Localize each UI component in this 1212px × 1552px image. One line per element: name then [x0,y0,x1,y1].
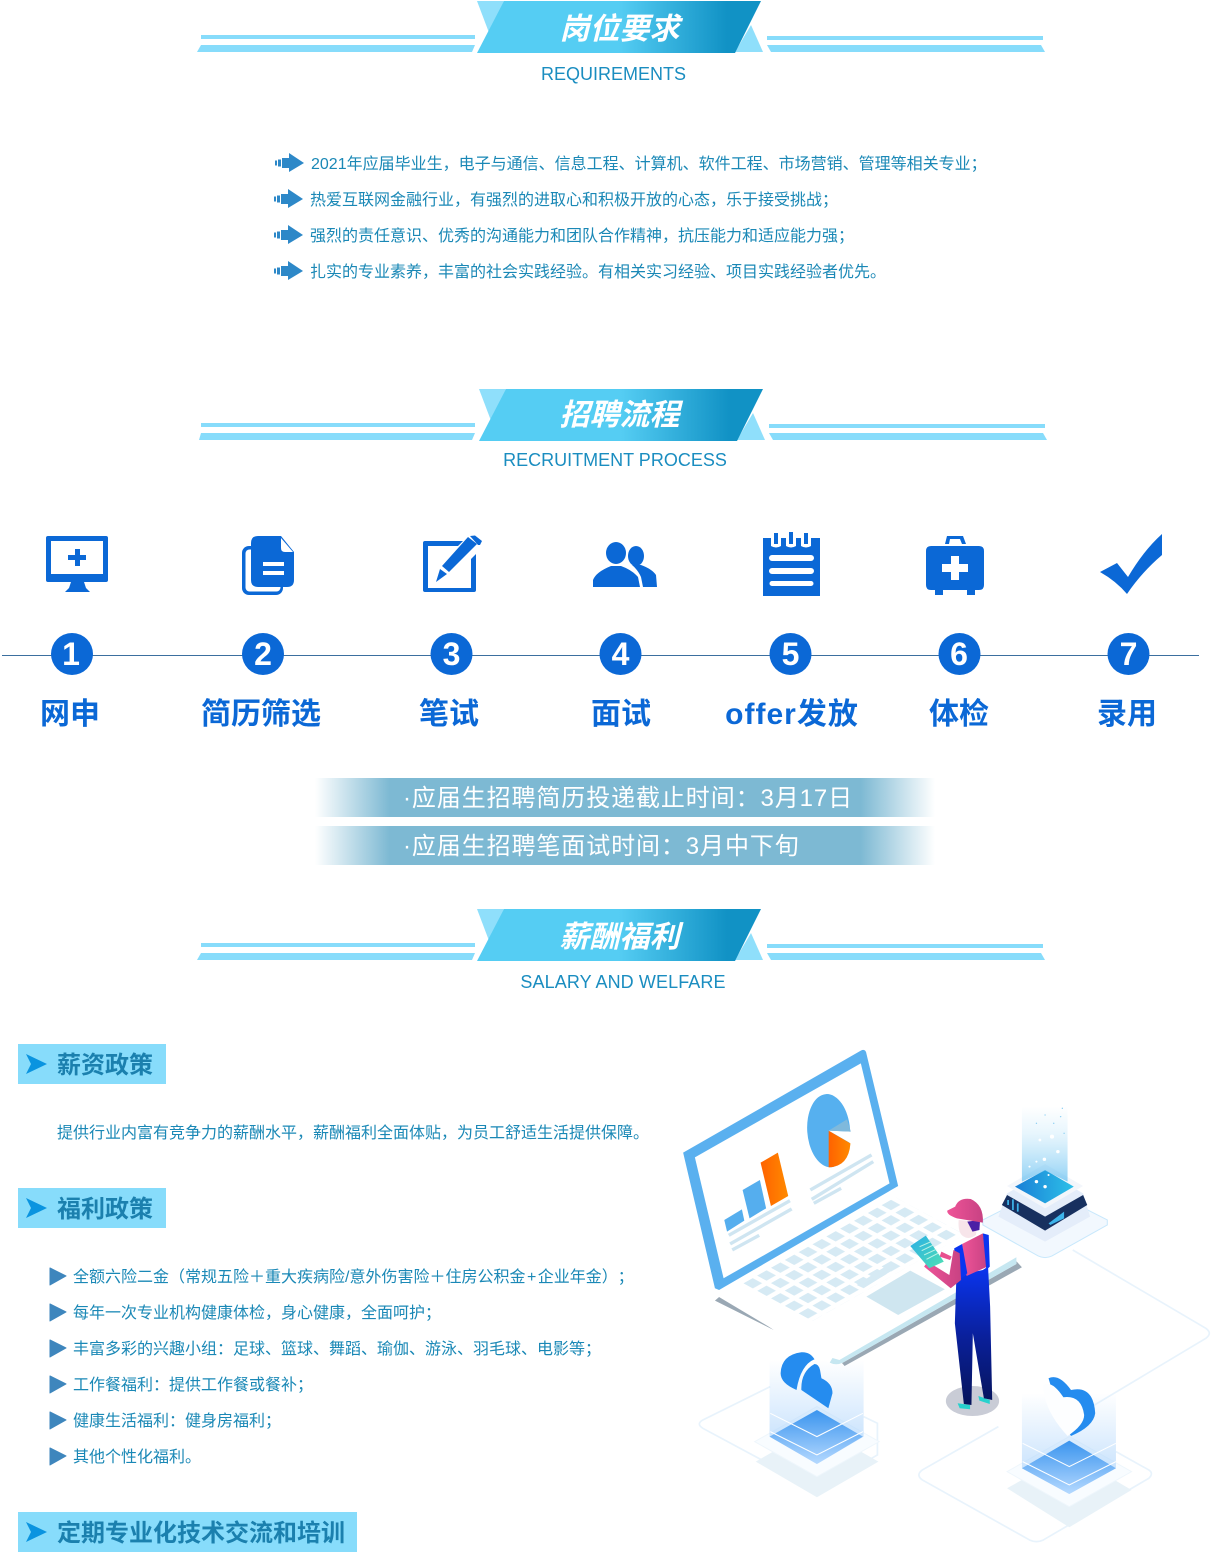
tag: salary policy [18,1044,166,1084]
left node shadow [756,1427,878,1497]
platform outlines [699,1250,1209,1542]
laptop lid [683,1050,898,1290]
person [910,1199,999,1416]
step 3: written test [419,536,482,731]
illustration: laptop and person [683,1050,1209,1542]
section header: requirements: 岗位要求 [560,13,683,46]
welfare item 6: 其他个性化福利。 [73,1448,201,1466]
section header: requirements: REQUIREMENTS [541,64,686,84]
icon: monitor [46,536,108,592]
left cloud icon [781,1352,832,1408]
step 4: interview [591,542,657,731]
welfare item 3: 丰富多彩的兴趣小组：足球、篮球、舞蹈、瑜伽、游泳、羽毛球、电影等； [73,1340,601,1358]
bullet requirement 2: 热爱互联网金融行业，有强烈的进取心和积极开放的心态，乐于接受挑战； [310,191,838,209]
step 6: medical check: 6 [950,636,968,672]
right platform device [983,1107,1107,1258]
section header: salary and welfare: SALARY AND WELFARE [520,972,726,992]
left node prism [770,1360,864,1464]
laptop base [718,1187,1016,1364]
icon: notepad [763,532,820,596]
step 7: hired: 7 [1120,636,1137,672]
tag: training [18,1512,357,1552]
step 6: medical check: 体检 [929,698,989,731]
icon: check mark [1100,534,1162,594]
welfare item 1: 全额六险二金（常规五险＋重大疾病险/意外伤害险＋住房公积金+企业年金）； [73,1267,634,1286]
right cloud icon [1043,1377,1095,1436]
notice: test time: ·应届生招聘笔面试时间：3月中下旬 [403,833,800,860]
step 7: hired: 录用 [1097,698,1157,731]
tag: welfare policy: 福利政策 [57,1196,153,1223]
step 3: written test: 3 [443,636,460,672]
section header: recruitment process [199,389,1047,470]
icon: documents [242,536,294,595]
bullet requirement 1: 2021年应届毕业生，电子与通信、信息工程、计算机、软件工程、市场营销、管理等相关专业； [311,154,987,173]
trackpad [866,1271,945,1315]
section header: salary and welfare: 薪酬福利 [560,921,684,954]
space bar [857,1263,898,1288]
section header: recruitment process: 招聘流程 [560,399,683,432]
step 2: resume screening: 简历筛选 [201,698,321,731]
welfare item 5: 健康生活福利：健身房福利； [73,1412,281,1430]
step 1: online application: 1 [62,636,80,672]
step 7: hired [1097,534,1162,731]
step 6: medical check [926,536,989,731]
notice: resume deadline: ·应届生招聘简历投递截止时间：3月17日 [403,785,853,812]
section header: requirements [197,1,1045,84]
section header: recruitment process: RECRUITMENT PROCESS [503,450,727,470]
icon: edit note [423,536,482,592]
icon: medical kit [926,536,984,595]
right node shadow [1007,1453,1132,1527]
step 1: online application [40,536,108,731]
bar chart [724,1153,792,1250]
tag: training: 定期专业化技术交流和培训 [57,1519,345,1547]
timeline line [2,654,1199,656]
bullet requirement 3: 强烈的责任意识、优秀的沟通能力和团队合作精神，抗压能力和适应能力强； [310,226,854,245]
keyboard [743,1197,965,1321]
requirements list [274,153,987,281]
bullet requirement 4: 扎实的专业素养，丰富的社会实践经验。有相关实习经验、项目实践经验者优先。 [310,263,886,281]
right node tile [1007,1437,1132,1507]
tag: welfare policy [18,1188,166,1228]
laptop base shadow [715,1261,1022,1366]
step 2: resume screening: 2 [254,636,272,672]
step 2: resume screening [201,536,321,731]
salary paragraph: 提供行业内富有竞争力的薪酬水平，薪酬福利全面体贴，为员工舒适生活提供保障。 [57,1124,649,1142]
icon: two people [593,542,657,587]
welfare item 2: 每年一次专业机构健康体检，身心健康，全面呵护； [73,1304,441,1322]
step 4: interview: 面试 [591,698,651,731]
laptop screen [695,1063,890,1278]
step 4: interview: 4 [612,636,630,672]
pie chart [805,1093,873,1203]
step 3: written test: 笔试 [419,698,479,731]
welfare list [50,1267,634,1466]
left node tile [755,1407,879,1477]
right node prism [1022,1393,1116,1494]
tag: salary policy: 薪资政策 [57,1052,153,1079]
notice: test time [315,826,935,865]
section header: salary and welfare [197,909,1045,992]
step 1: online application: 网申 [40,698,100,731]
welfare item 4: 工作餐福利：提供工作餐或餐补； [73,1376,313,1394]
notice: resume deadline [315,778,935,817]
step 5: offer: 5 [782,636,799,672]
step 5: offer [725,532,859,731]
step 5: offer: offer发放 [725,698,859,731]
